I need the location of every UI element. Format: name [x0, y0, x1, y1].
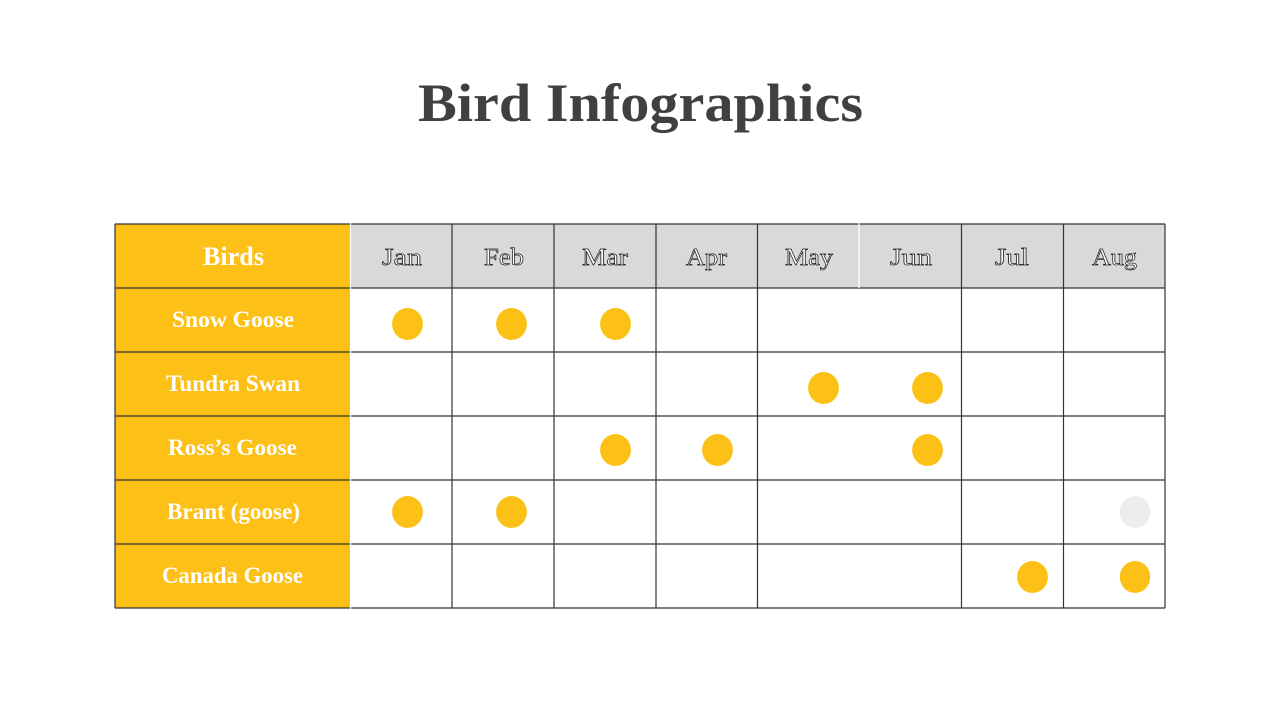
month headings: Aug: [1092, 245, 1137, 271]
row: Brant (goose): [167, 496, 1150, 528]
month headings: Mar: [582, 245, 628, 271]
title: Bird Infographics: [418, 73, 863, 133]
month headings: [382, 245, 1137, 271]
panel: bird names column: [115, 224, 350, 608]
month headings: Jan: [382, 245, 422, 271]
row: Ross's Goose: [168, 434, 943, 466]
row: Snow Goose: Snow Goose: [172, 307, 294, 332]
month headings: May: [785, 245, 833, 271]
row: Canada Goose: [162, 561, 1150, 593]
row: Ross's Goose: Ross’s Goose: [168, 435, 297, 460]
row: Tundra Swan: [166, 371, 943, 404]
row: Tundra Swan: Tundra Swan: [166, 371, 300, 396]
month headings: Apr: [686, 245, 727, 271]
row: Brant (goose): Brant (goose): [167, 499, 300, 524]
panel: month header band: [351, 224, 1165, 288]
month headings: Jul: [995, 245, 1029, 271]
table grid: [115, 224, 1165, 608]
month headings: Feb: [484, 245, 524, 271]
column heading: Birds: Birds: [203, 242, 264, 271]
month headings: Jun: [890, 245, 932, 271]
table: [115, 223, 1165, 609]
row: Canada Goose: Canada Goose: [162, 563, 303, 588]
row: Snow Goose: [172, 307, 631, 340]
